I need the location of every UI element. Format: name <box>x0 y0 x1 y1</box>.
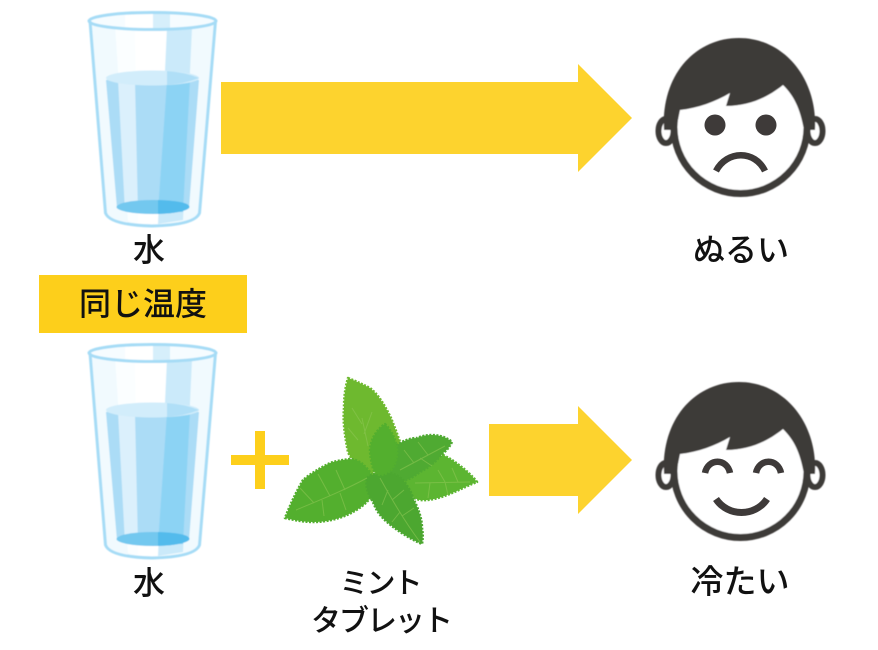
label: mint tablet: タブレット <box>311 605 451 638</box>
label: water: 水 <box>133 565 165 601</box>
badge: same temperature: 同じ温度 <box>79 286 207 322</box>
label: water: 水 <box>133 232 165 268</box>
face: smiling <box>658 382 822 538</box>
icon: mint leaves <box>285 378 477 544</box>
label: mint tablet <box>311 568 451 638</box>
arrow: mint to cool <box>489 406 632 514</box>
glass: water with mint <box>89 344 216 558</box>
label: cool: 冷たい <box>690 563 790 600</box>
arrow: water to lukewarm <box>221 64 632 172</box>
label: mint tablet: ミント <box>339 568 421 600</box>
icon: plus sign <box>231 431 289 489</box>
glass: plain water <box>89 12 216 226</box>
badge: same temperature <box>39 275 247 333</box>
label: lukewarm: ぬるい <box>693 232 789 268</box>
face: frowning <box>658 38 822 194</box>
